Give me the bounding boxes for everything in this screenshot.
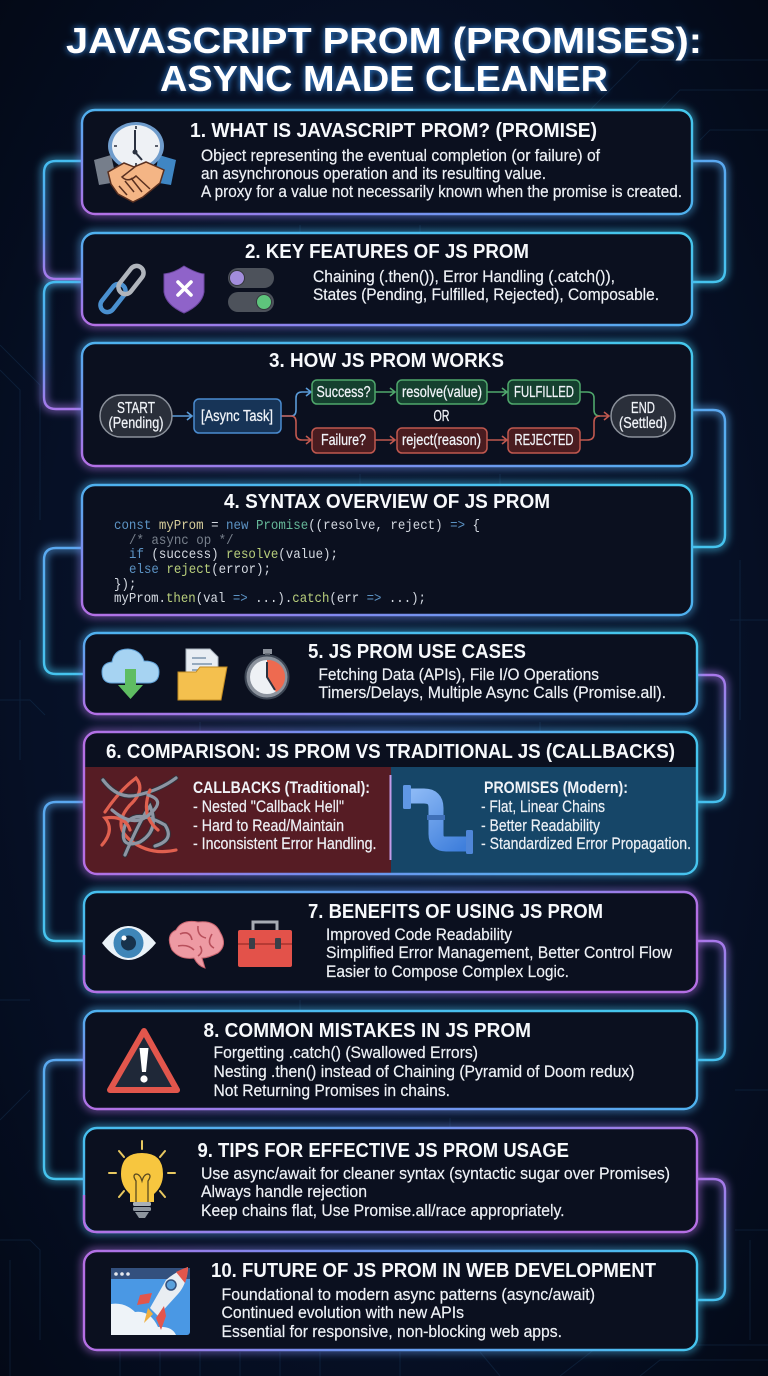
text block: Essential for responsive, non-blocking web apps.: [222, 1322, 562, 1341]
heading: 1. WHAT IS JAVASCRIPT PROM? (PROMISE): [190, 119, 597, 142]
fulfilled node: [508, 380, 580, 404]
text block: Simplified Error Management, Better Control Flow: [326, 943, 673, 962]
code block: const myProm = new Promise((resolve, reject) => {: [114, 518, 480, 534]
code block: myProm.then(val => ...).catch(err => ...);: [114, 591, 426, 607]
success node: Success?: [316, 384, 371, 401]
text block: Forgetting .catch() (Swallowed Errors): [214, 1043, 478, 1062]
panel 6: comparison: [84, 732, 697, 874]
callbacks background: [84, 767, 391, 874]
icon: tangled callbacks: [102, 778, 176, 855]
text block: an asynchronous operation and its resulting value.: [201, 164, 546, 183]
title: [66, 20, 702, 99]
text block: [318, 665, 666, 702]
icon: pipe: [403, 785, 473, 854]
panel 7: benefits: [84, 892, 697, 992]
panel 1: what is javascript prom: [82, 110, 692, 214]
icon: brain: [169, 921, 224, 968]
callbacks text: [193, 778, 376, 853]
flow diagram: [100, 380, 675, 453]
promises text: - Better Readability: [481, 816, 600, 835]
heading: 5. JS PROM USE CASES: [308, 640, 526, 663]
code block: [114, 518, 480, 607]
icon: eye: [102, 926, 156, 960]
title: ASYNC MADE CLEANER: [160, 58, 608, 99]
rejected node: REJECTED: [514, 432, 574, 449]
resolve node: [397, 380, 487, 404]
end node: [611, 395, 675, 437]
icon: chain link: [98, 263, 146, 315]
heading: 10. FUTURE OF JS PROM IN WEB DEVELOPMENT: [211, 1259, 656, 1282]
panel 4: syntax overview: [82, 485, 692, 615]
icon: warning triangle: [110, 1031, 177, 1090]
text block: [222, 1285, 595, 1341]
success node: [312, 380, 375, 404]
text block: Not Returning Promises in chains.: [214, 1081, 450, 1100]
failure node: [312, 428, 375, 453]
panel 9: tips: [84, 1128, 697, 1232]
code block: /* async op */: [129, 533, 234, 549]
resolve node: resolve(value): [402, 384, 482, 401]
text block: States (Pending, Fulfilled, Rejected), Composable.: [313, 285, 659, 304]
divider: [390, 775, 392, 860]
callbacks text: - Inconsistent Error Handling.: [193, 834, 376, 853]
text block: Object representing the eventual completion (or failure) of: [201, 146, 600, 165]
icon: toolbox: [238, 922, 292, 967]
icon: rocket in browser window: [111, 1267, 190, 1335]
text block: A proxy for a value not necessarily known when the promise is created.: [201, 182, 682, 201]
code block: });: [114, 577, 136, 593]
text block: Keep chains flat, Use Promise.all/race appropriately.: [201, 1201, 564, 1220]
callbacks text: - Hard to Read/Maintain: [193, 816, 344, 835]
promises text: - Flat, Linear Chains: [481, 797, 605, 816]
text block: Nesting .then() instead of Chaining (Pyramid of Doom redux): [214, 1062, 634, 1081]
text block: Easier to Compose Complex Logic.: [326, 962, 569, 981]
start node: (Pending): [108, 415, 164, 432]
panel 3: how js prom works: [82, 343, 692, 466]
code block: else reject(error);: [129, 562, 271, 578]
start node: [100, 395, 172, 437]
connectors between panels: [44, 161, 725, 1300]
reject node: [397, 428, 487, 453]
heading: 8. COMMON MISTAKES IN JS PROM: [204, 1019, 531, 1042]
callbacks text: - Nested "Callback Hell": [193, 797, 344, 816]
text block: Continued evolution with new APIs: [222, 1303, 464, 1322]
panel 5: use cases: [84, 633, 697, 714]
icon: stopwatch: [246, 649, 288, 698]
title: JAVASCRIPT PROM (PROMISES):: [66, 20, 702, 61]
icon: toggles: [228, 268, 274, 312]
rejected node: [508, 428, 580, 453]
heading: 6. COMPARISON: JS PROM VS TRADITIONAL JS (CALLBACKS): [106, 740, 675, 763]
icon: folder with document: [178, 649, 227, 700]
text block: [313, 267, 659, 304]
text block: [201, 1164, 670, 1220]
promises background: [391, 767, 697, 874]
end node: (Settled): [619, 415, 667, 432]
text block: [214, 1043, 634, 1100]
text block: Fetching Data (APIs), File I/O Operations: [318, 665, 599, 684]
text block: Always handle rejection: [201, 1182, 367, 1201]
code block: if (success) resolve(value);: [129, 547, 338, 563]
promises text: PROMISES (Modern):: [484, 778, 628, 797]
text block: Use async/await for cleaner syntax (syntactic sugar over Promises): [201, 1164, 670, 1183]
or label: OR: [434, 408, 450, 425]
text block: Chaining (.then()), Error Handling (.catch()),: [313, 267, 615, 286]
promises text: - Standardized Error Propagation.: [481, 834, 691, 853]
heading: 2. KEY FEATURES OF JS PROM: [245, 240, 529, 263]
end node: END: [631, 400, 655, 417]
callbacks text: CALLBACKS (Traditional):: [193, 778, 370, 797]
text block: [326, 925, 673, 981]
async task node: [194, 399, 281, 433]
icon: cloud download: [102, 649, 159, 699]
text block: Improved Code Readability: [326, 925, 512, 944]
start node: START: [117, 400, 155, 417]
heading: 9. TIPS FOR EFFECTIVE JS PROM USAGE: [198, 1139, 569, 1162]
icon: light bulb: [109, 1141, 175, 1218]
reject node: reject(reason): [402, 432, 481, 449]
promises text: [481, 778, 691, 853]
panel 10: future: [84, 1251, 697, 1350]
panel 2: key features: [82, 233, 692, 325]
fulfilled node: FULFILLED: [514, 384, 574, 401]
failure node: Failure?: [321, 432, 366, 449]
text block: [201, 146, 682, 201]
async task node: [Async Task]: [201, 408, 273, 425]
icon: clock and handshake: [94, 122, 176, 202]
heading: 7. BENEFITS OF USING JS PROM: [308, 900, 603, 923]
flow arrows: [172, 388, 609, 444]
panel 8: common mistakes: [84, 1011, 697, 1109]
heading: 4. SYNTAX OVERVIEW OF JS PROM: [224, 490, 550, 513]
icon: shield with x: [164, 266, 204, 313]
text block: Timers/Delays, Multiple Async Calls (Promise.all).: [318, 683, 666, 702]
heading: 3. HOW JS PROM WORKS: [269, 349, 504, 372]
text block: Foundational to modern async patterns (async/await): [222, 1285, 595, 1304]
